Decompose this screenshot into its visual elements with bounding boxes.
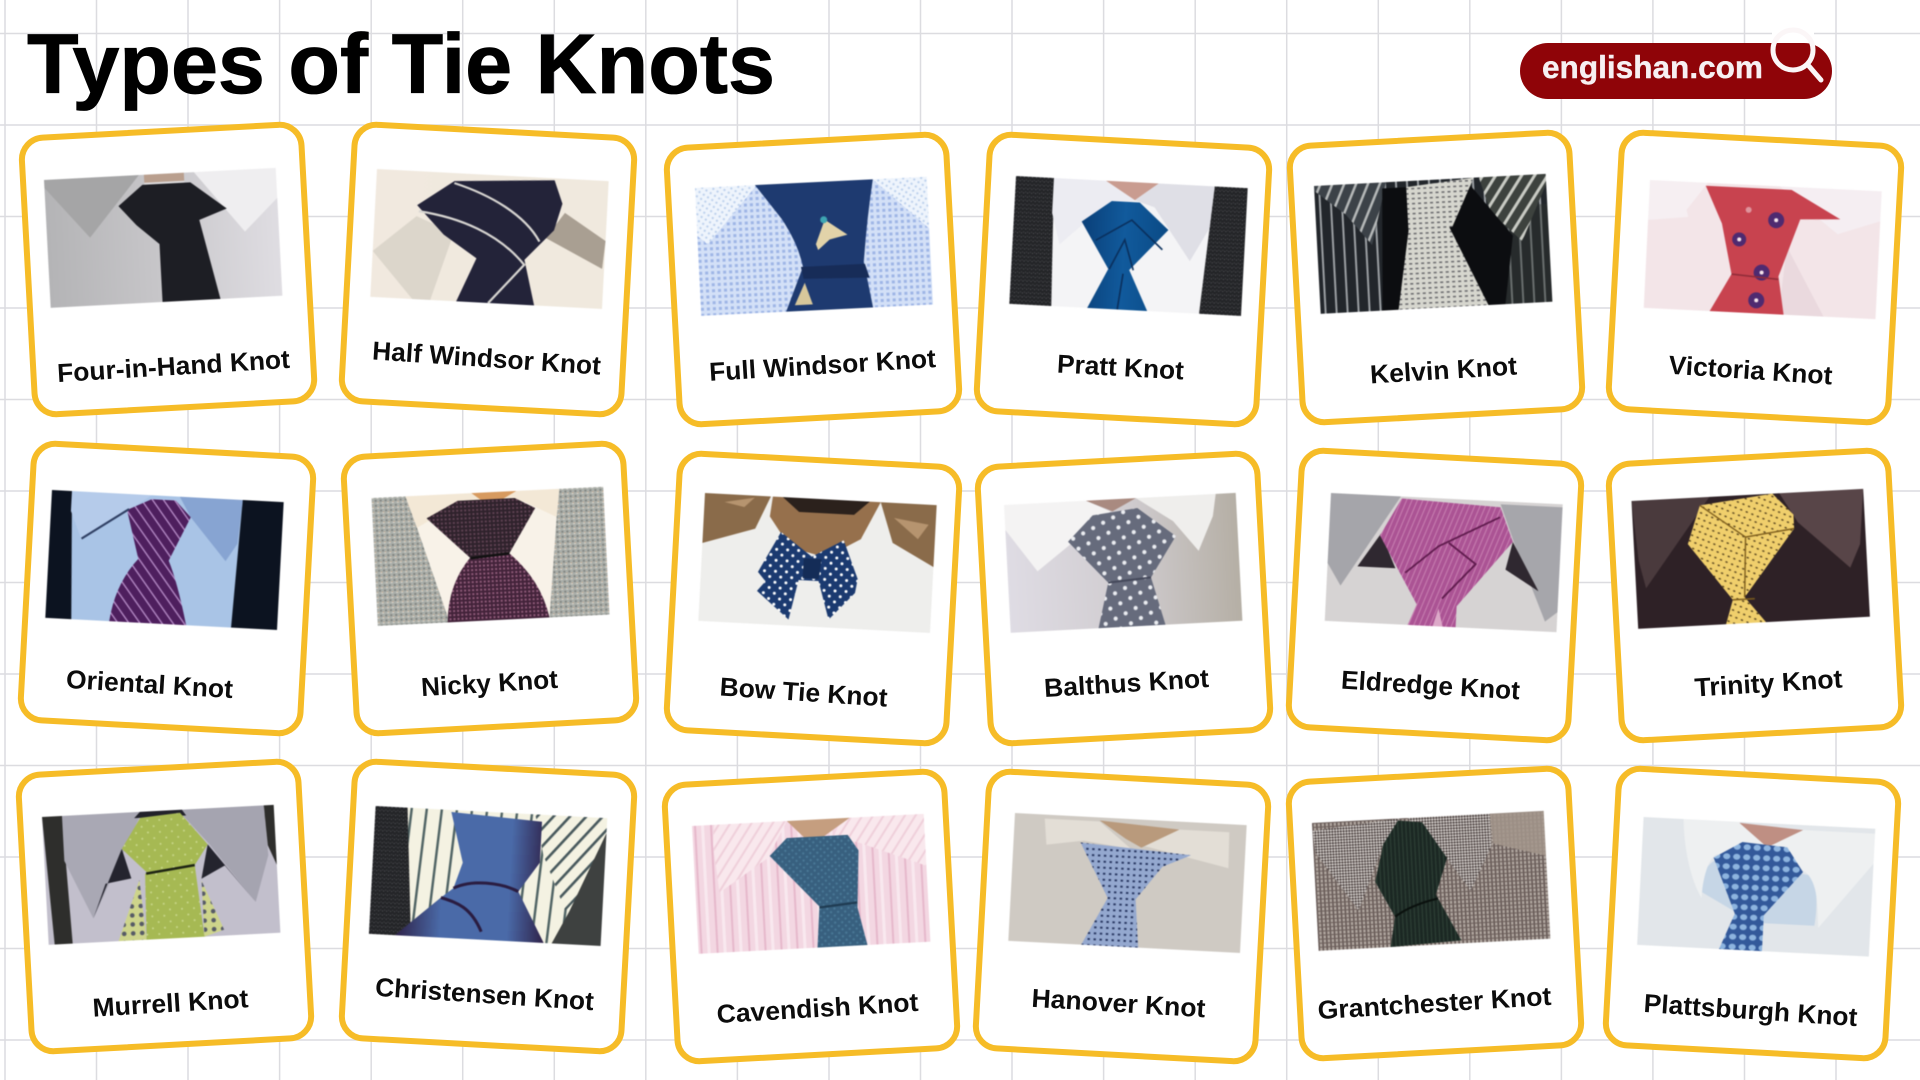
- label: Cavendish Knot: [716, 987, 920, 1029]
- card frame: [1288, 450, 1582, 741]
- card frame: [1608, 450, 1902, 741]
- photo: pink striped shirt with teal tie: [692, 814, 930, 954]
- photo: lilac shirt with lime green tie: [42, 805, 280, 945]
- label: Half Windsor Knot: [371, 335, 602, 381]
- label: Bow Tie Knot: [719, 671, 889, 713]
- photo: pale blue shirt with blue dotted tie: [1637, 817, 1875, 957]
- card: Grantchester Knot: [1288, 768, 1582, 1059]
- label: Oriental Knot: [65, 664, 234, 704]
- card: Oriental Knot: [20, 443, 314, 734]
- card: Cavendish Knot: [664, 771, 958, 1062]
- card frame: [977, 453, 1271, 744]
- site name: englishan.com: [1542, 49, 1763, 85]
- card: Murrell Knot: [18, 761, 312, 1052]
- card: Full Windsor Knot: [666, 134, 960, 425]
- card: Nicky Knot: [343, 443, 637, 734]
- card: Trinity Knot: [1608, 450, 1902, 741]
- label: Hanover Knot: [1031, 983, 1207, 1023]
- photo: white shirt with grey polka-dot tie: [1004, 493, 1242, 633]
- photo: grey collar with magenta braided tie: [1325, 493, 1563, 632]
- card frame: [343, 443, 637, 734]
- card: Victoria Knot: [1608, 132, 1902, 423]
- photo: grey shirt with black four-in-hand tie: [44, 168, 282, 308]
- icon: magnifying glass: [1773, 30, 1821, 80]
- label: Kelvin Knot: [1369, 351, 1518, 389]
- card frame: [666, 134, 960, 425]
- photo: white shirt with navy polka-dot bow tie: [698, 493, 937, 633]
- photo: dark shirt with gold trinity tie: [1632, 489, 1870, 629]
- photo: striped shirt with silver tie: [1314, 174, 1552, 314]
- photo: blue shirt with purple striped tie: [45, 490, 284, 630]
- card frame: [341, 761, 635, 1052]
- card frame: [1608, 132, 1902, 423]
- card: Christensen Knot: [341, 761, 635, 1052]
- label: Grantchester Knot: [1317, 981, 1552, 1025]
- card frame: [21, 124, 315, 415]
- card frame: [975, 771, 1269, 1062]
- photo: cream shirt with navy striped tie: [370, 169, 609, 309]
- photo: striped shirt with blue tie: [369, 806, 607, 946]
- photo: tweed jacket with dark purple knit tie: [372, 487, 609, 626]
- card: Four-in-Hand Knot: [21, 124, 315, 415]
- label: Balthus Knot: [1043, 663, 1210, 703]
- card frame: [666, 453, 960, 744]
- label: Nicky Knot: [420, 664, 559, 702]
- label: Plattsburgh Knot: [1643, 988, 1859, 1032]
- label: Trinity Knot: [1694, 664, 1844, 703]
- card: Hanover Knot: [975, 771, 1269, 1062]
- card frame: [1288, 768, 1582, 1059]
- card: Bow Tie Knot: [666, 453, 960, 744]
- title: Types of Tie Knots: [27, 17, 775, 111]
- card frame: [664, 771, 958, 1062]
- card: Pratt Knot: [976, 134, 1270, 425]
- photo: brown check shirt with dark green tie: [1312, 811, 1550, 951]
- photo: pale shirt with red floral tie: [1644, 180, 1882, 319]
- label: Christensen Knot: [374, 972, 595, 1016]
- card frame: [20, 443, 314, 734]
- label: Four-in-Hand Knot: [56, 344, 291, 388]
- card frame: [341, 124, 635, 415]
- label: Murrell Knot: [92, 983, 250, 1023]
- card frame: [1605, 768, 1899, 1059]
- label: Eldredge Knot: [1340, 665, 1521, 705]
- card frame: [1289, 132, 1583, 423]
- card: Half Windsor Knot: [341, 124, 635, 415]
- card: Plattsburgh Knot: [1605, 768, 1899, 1059]
- card frame: [976, 134, 1270, 425]
- card frame: [18, 761, 312, 1052]
- photo: beige shirt with blue patterned tie: [1008, 813, 1247, 953]
- label: Full Windsor Knot: [708, 343, 937, 387]
- card: Eldredge Knot: [1288, 450, 1582, 741]
- card: Balthus Knot: [977, 453, 1271, 744]
- label: Pratt Knot: [1056, 348, 1185, 386]
- label: Victoria Knot: [1668, 350, 1834, 390]
- photo: suit, white shirt and blue braided tie: [1009, 176, 1248, 316]
- photo: blue check shirt with navy duck tie: [695, 177, 933, 316]
- logo badge: englishan.com: [1520, 27, 1832, 99]
- card: Kelvin Knot: [1289, 132, 1583, 423]
